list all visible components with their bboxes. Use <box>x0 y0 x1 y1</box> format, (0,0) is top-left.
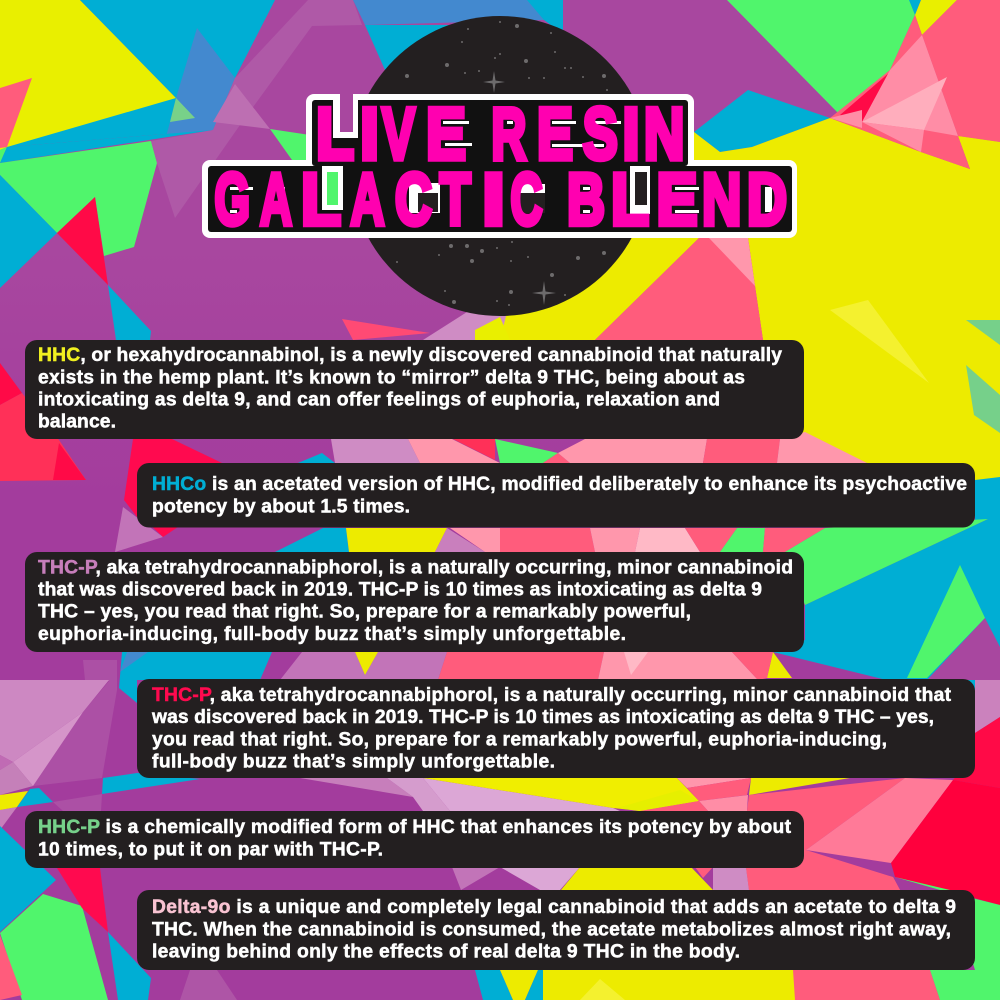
panel: HHCo <box>137 463 975 528</box>
title: Live Resin Galactic Blend: I <box>360 92 379 175</box>
panel: Delta-9o: Delta-9o is a unique and completely legal cannabinoid that adds an acetate to delta 9 <box>152 897 956 918</box>
title: Live Resin Galactic Blend: C <box>395 158 432 240</box>
panel: HHC <box>25 340 804 439</box>
panel: Delta-9o <box>137 890 975 970</box>
title: Live Resin Galactic Blend: E <box>656 158 698 240</box>
title: Live Resin Galactic Blend: R <box>491 92 526 175</box>
title: Live Resin Galactic Blend: E <box>537 92 573 175</box>
panel: Delta-9o: THC. When the cannabinoid is consumed, the acetate metabolizes almost right away, <box>152 920 951 940</box>
title: Live Resin Galactic Blend: S <box>583 92 618 175</box>
panel: THC-P (purple heading): euphoria-inducing, full-body buzz that’s simply unforgettable. <box>38 624 626 645</box>
title: Live Resin Galactic Blend: T <box>440 158 471 240</box>
panel: HHC-P: 10 times, to put it on par with THC-P. <box>38 840 383 860</box>
panel: HHC: balance. <box>38 412 116 432</box>
title: Live Resin Galactic Blend: A <box>350 158 384 240</box>
panel: HHC: exists in the hemp plant. It’s known to “mirror” delta 9 THC, being about as <box>38 367 745 388</box>
title: Live Resin Galactic Blend: A <box>260 158 292 240</box>
panel: THC-P (red heading): full-body buzz that’s simply unforgettable. <box>152 752 555 773</box>
title: Live Resin Galactic Blend: N <box>644 92 684 175</box>
panel: THC-P (red heading): THC-P, aka tetrahydrocannabiphorol, is a naturally occurring, minor cannabinoid that <box>152 685 952 706</box>
panel: HHCo: HHCo is an acetated version of HHC, modified deliberately to enhance its psychoactive <box>152 474 967 495</box>
panel: HHC-P <box>25 811 804 868</box>
panel: THC-P (purple heading): THC-P, aka tetrahydrocannabiphorol, is a naturally occurring, minor cannabinoid <box>38 557 793 578</box>
panel: THC-P (purple heading) <box>25 552 804 652</box>
panel: HHC: HHC, or hexahydrocannabinol, is a newly discovered cannabinoid that naturally <box>38 345 782 366</box>
title: Live Resin Galactic Blend: B <box>567 158 605 240</box>
galaxy circle with stars <box>350 16 650 316</box>
title: Live Resin Galactic Blend: L <box>316 92 354 175</box>
title: Live Resin Galactic Blend: I <box>482 158 505 240</box>
title: Live Resin Galactic Blend <box>202 90 797 240</box>
panel: Delta-9o: leaving behind only the effects of real delta 9 THC in the body. <box>152 942 740 963</box>
title: Live Resin Galactic Blend: C <box>510 158 542 240</box>
panel: THC-P (red heading) <box>137 679 975 778</box>
panel: HHC-P: HHC-P is a chemically modified form of HHC that enhances its potency by about <box>38 817 792 838</box>
title: Live Resin Galactic Blend: E <box>426 92 466 175</box>
panel: HHC: intoxicating as delta 9, and can offer feelings of euphoria, relaxation and <box>38 390 720 410</box>
panel: HHCo: potency by about 1.5 times. <box>152 496 410 518</box>
title: Live Resin Galactic Blend: D <box>747 158 787 240</box>
panel: THC-P (red heading): you read that right. So, prepare for a remarkably powerful, euphoria-inducing, <box>152 730 887 750</box>
title: Live Resin Galactic Blend: V <box>382 92 415 175</box>
panel: THC-P (red heading): was discovered back in 2019. THC-P is 10 times as intoxicating as delta 9 THC – yes, <box>151 707 934 728</box>
title: Live Resin Galactic Blend: N <box>702 158 741 240</box>
title: Live Resin Galactic Blend: G <box>214 158 250 240</box>
title: Live Resin Galactic Blend: L <box>301 158 341 240</box>
panel: THC-P (purple heading): that was discovered back in 2019. THC-P is 10 times as intoxicating as delta 9 <box>38 580 762 600</box>
title: Live Resin Galactic Blend: L <box>611 158 649 240</box>
title: Live Resin Galactic Blend: I <box>622 92 640 175</box>
panel: THC-P (purple heading): THC – yes, you read that right. So, prepare for a remarkably powerful, <box>38 602 691 623</box>
